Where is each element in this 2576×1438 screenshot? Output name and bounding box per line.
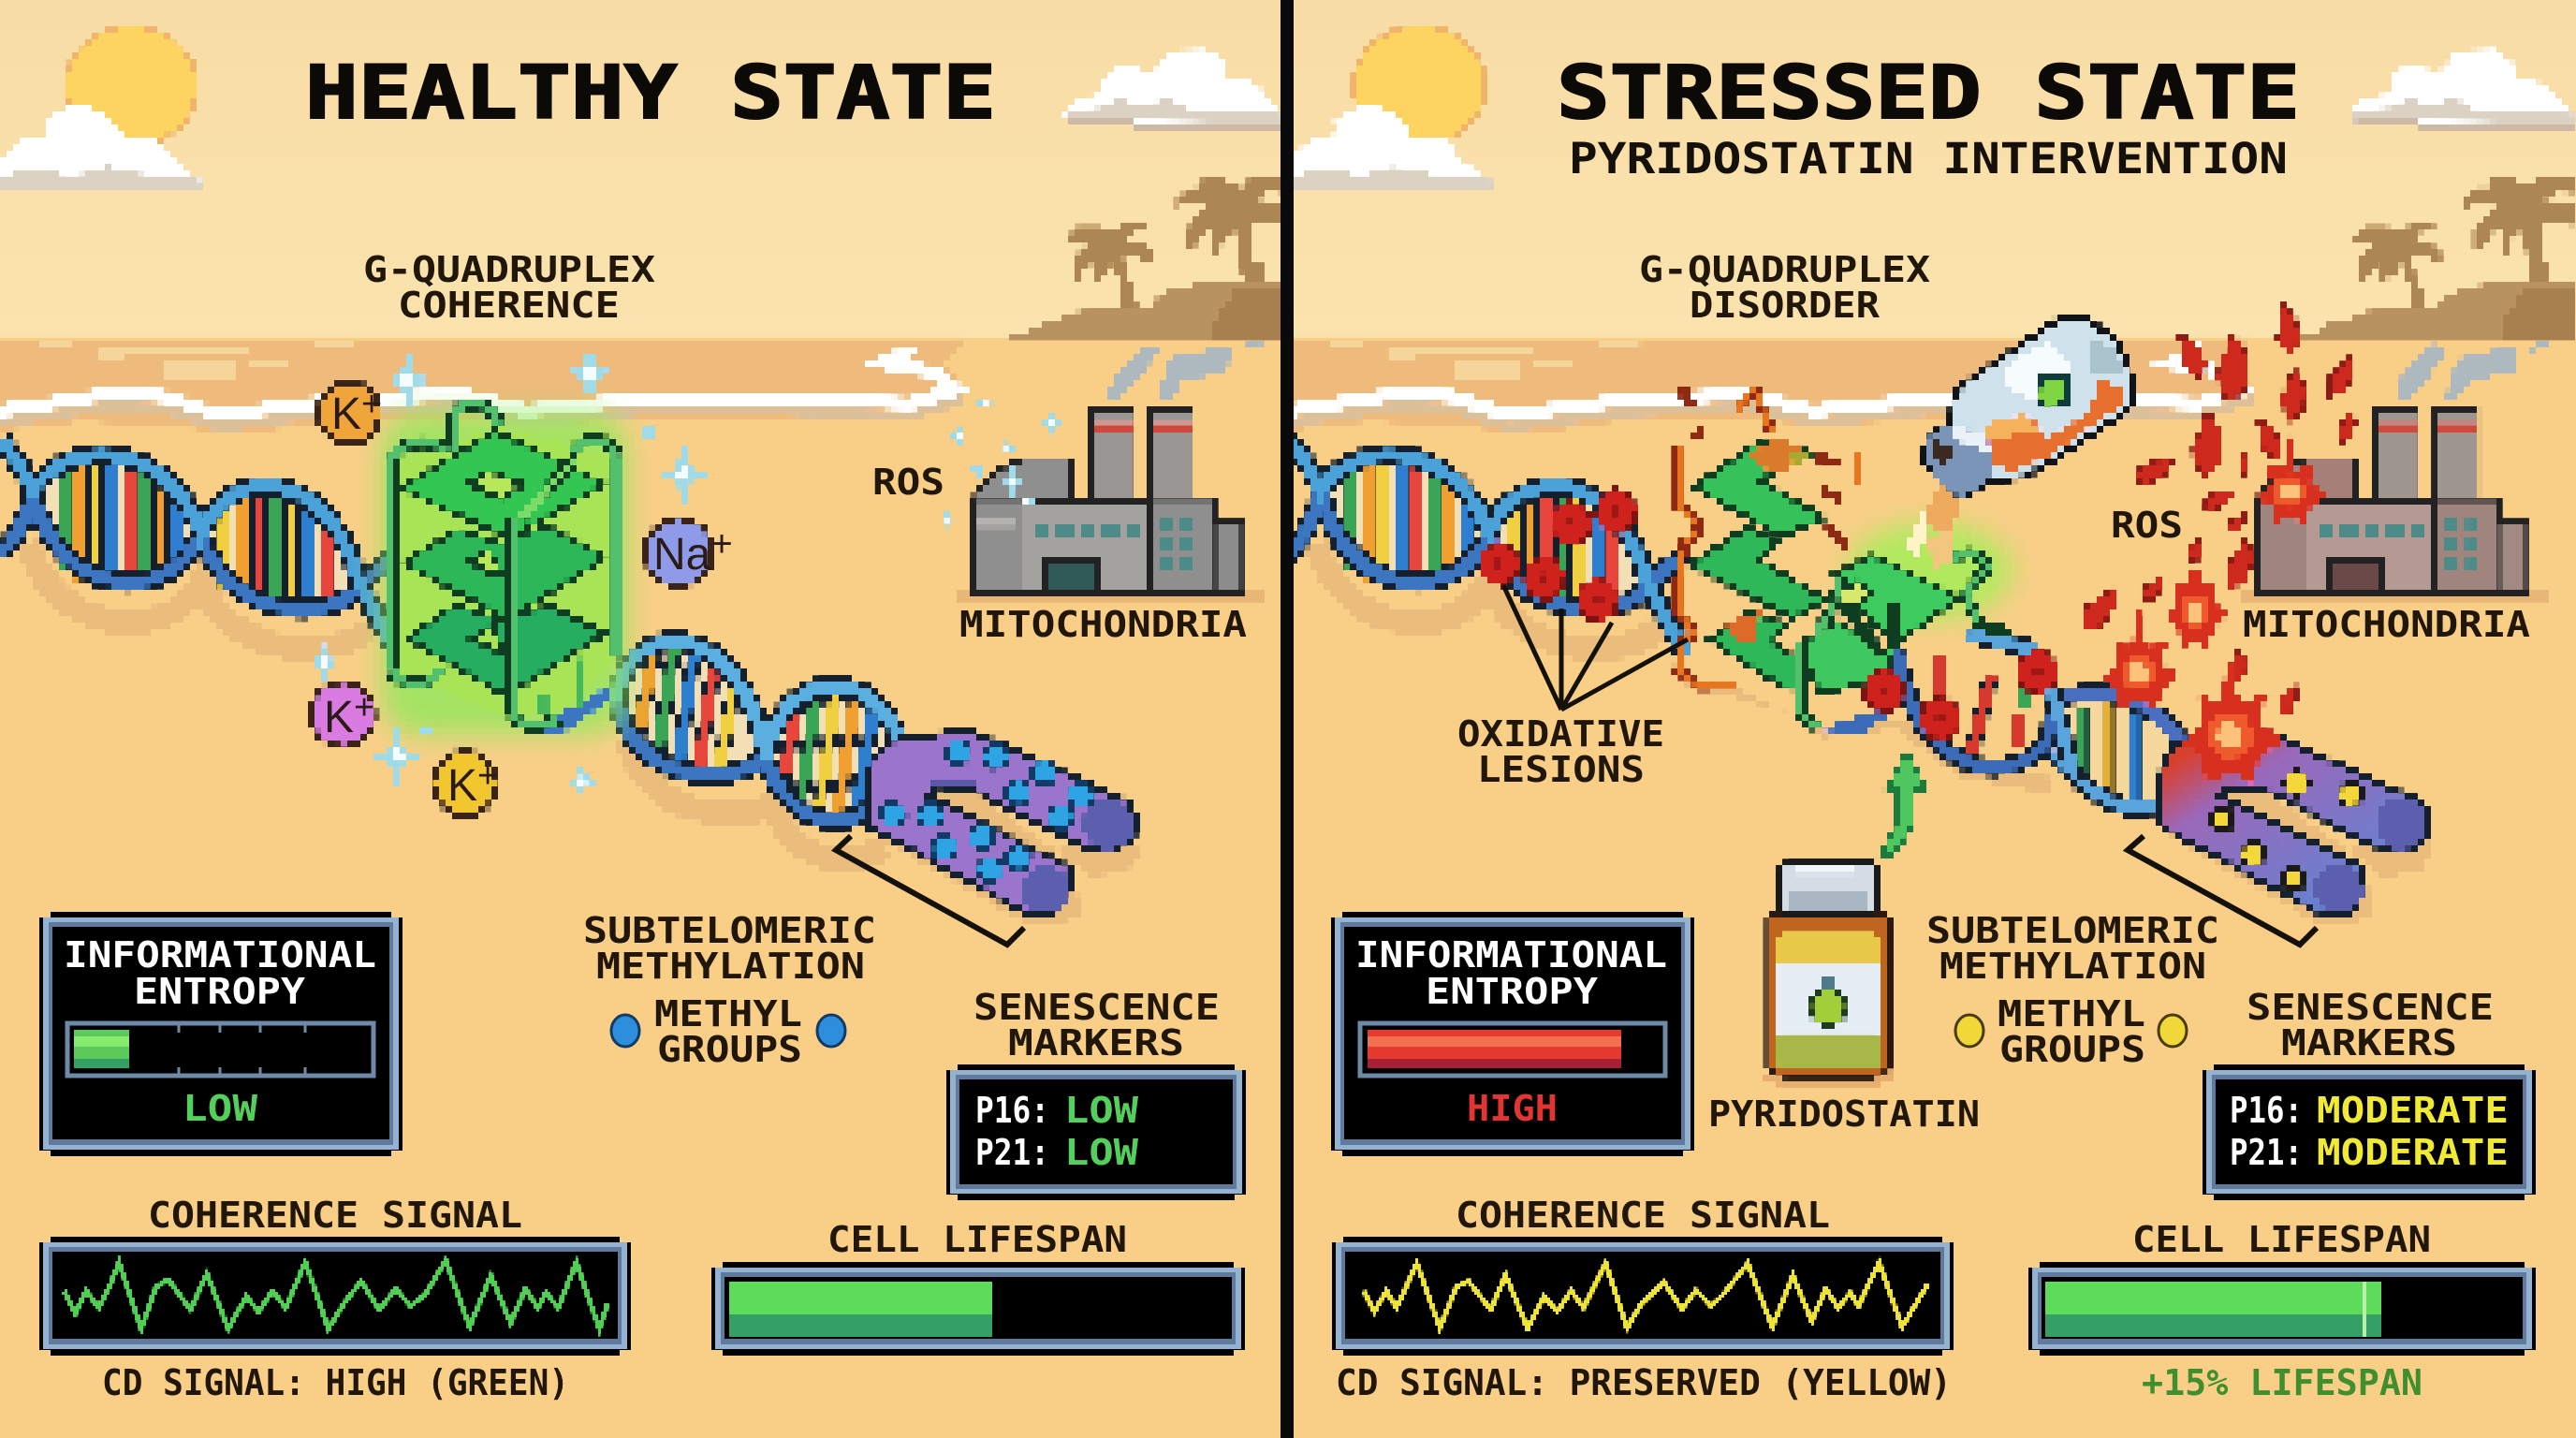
title: HEALTHY STATE xyxy=(305,51,996,136)
ion labels xyxy=(324,385,733,811)
label: mitochondria: MITOCHONDRIA xyxy=(959,604,1247,645)
label: oxidative lesions: LESIONS xyxy=(1477,749,1645,790)
glow around G-quadruplex xyxy=(382,412,627,735)
ion labels: K xyxy=(447,761,477,811)
label: coherence signal: COHERENCE SIGNAL xyxy=(148,1195,522,1236)
panel: senescence readout: P21: xyxy=(975,1132,1049,1173)
DNA helix downstream, damaged xyxy=(1897,634,2187,808)
title: STRESSED STATE xyxy=(1557,51,2300,136)
panel: healthy state xyxy=(0,0,1289,1438)
label: cell lifespan: CELL LIFESPAN xyxy=(827,1219,1127,1260)
illustration: stressed scene xyxy=(1288,26,2576,1090)
panel: informational entropy: HIGH xyxy=(1467,1088,1558,1129)
ion labels: + xyxy=(361,385,382,424)
icon: sparkles around G-quadruplex xyxy=(307,341,706,803)
panel: senescence readout: P21: xyxy=(2230,1132,2303,1173)
label: G-quadruplex coherence: G-QUADRUPLEX xyxy=(363,249,655,290)
label: mitochondria: MITOCHONDRIA xyxy=(2243,604,2530,645)
label: coherence signal: COHERENCE SIGNAL xyxy=(1456,1195,1830,1236)
G-quadruplex structure xyxy=(390,404,618,734)
flame outlines around disordered G-quadruplex xyxy=(1678,384,1856,686)
DNA helix with lesions xyxy=(1288,440,1686,655)
label: subtelomeric methylation: SUBTELOMERIC xyxy=(583,910,876,951)
chart: coherence signal waveform xyxy=(39,1237,631,1356)
label: senescence markers xyxy=(2247,987,2494,1064)
panel: senescence readout xyxy=(2203,1064,2536,1200)
label: oxidative lesions: OXIDATIVE xyxy=(1457,713,1664,755)
icon: pyridostatin jar xyxy=(1764,861,1895,1090)
legend: methyl groups: METHYL xyxy=(654,993,802,1034)
label: oxidative lesions xyxy=(1457,713,1664,790)
panel: informational entropy xyxy=(39,912,402,1156)
icon: factory mitochondria xyxy=(2241,411,2549,600)
icon: damaged telomere xyxy=(2159,730,2431,925)
panel: informational entropy: ENTROPY xyxy=(1426,971,1598,1012)
label: senescence markers: MARKERS xyxy=(2281,1022,2457,1064)
DNA helix downstream xyxy=(616,635,900,859)
label: G-quadruplex disorder: G-QUADRUPLEX xyxy=(1639,249,1930,290)
label: G-quadruplex disorder xyxy=(1639,249,1930,326)
panel: senescence readout: LOW xyxy=(1064,1090,1138,1131)
arrow: drug binding xyxy=(1881,752,1927,857)
panel: senescence readout: LOW xyxy=(1064,1132,1138,1173)
label: senescence markers: SENESCENCE xyxy=(973,987,1220,1028)
icon: ROS fragments and bursts xyxy=(2075,303,2360,784)
oxidative lesions on DNA xyxy=(1479,489,2058,741)
panel: senescence readout: P16: xyxy=(975,1090,1049,1131)
subtitle: PYRIDOSTATIN INTERVENTION xyxy=(1569,134,2288,183)
bottle pouring pyridostatin xyxy=(1924,318,2132,524)
label: lifespan gain: +15% LIFESPAN xyxy=(2142,1362,2422,1403)
chart: cell lifespan bar xyxy=(2028,1262,2536,1356)
center divider xyxy=(1281,0,1294,1438)
chart: coherence signal waveform xyxy=(1332,1237,1954,1356)
ion labels: Na xyxy=(653,530,710,580)
legend: methyl groups: METHYL xyxy=(1998,993,2145,1034)
label: G-quadruplex disorder: DISORDER xyxy=(1690,285,1880,326)
label: pyridostatin: PYRIDOSTATIN xyxy=(1708,1093,1980,1135)
panel: senescence readout: MODERATE xyxy=(2317,1090,2509,1131)
icon: ROS sparkles xyxy=(939,390,1061,532)
panel: informational entropy xyxy=(1331,912,1694,1156)
scene background: sky and beach xyxy=(1288,0,2576,1438)
icon: ions xyxy=(311,382,712,815)
bracket: subtelomeric region xyxy=(2128,836,2317,945)
label: senescence markers xyxy=(973,987,1220,1064)
chart: cell lifespan bar xyxy=(711,1262,1245,1356)
label: ROS: ROS xyxy=(2111,505,2183,546)
icon: telomere with shadow xyxy=(866,730,1138,925)
scene background: sky and beach xyxy=(0,0,1288,1438)
label: G-quadruplex coherence: COHERENCE xyxy=(398,285,620,326)
panel: senescence readout xyxy=(946,1064,1246,1200)
sun, clouds, palm island and shoreline xyxy=(1288,26,2576,433)
icon: factory mitochondria xyxy=(957,411,1265,600)
DNA helix upstream xyxy=(0,440,398,655)
ion labels: K xyxy=(331,389,361,439)
label: CD signal: CD SIGNAL: HIGH (GREEN) xyxy=(102,1362,569,1403)
label: G-quadruplex coherence xyxy=(363,249,655,326)
pointer lines: oxidative lesions xyxy=(1503,585,1688,710)
panel: informational entropy: LOW xyxy=(183,1088,257,1129)
binding cage xyxy=(1800,553,2010,733)
panel: senescence readout: P16: xyxy=(2230,1090,2303,1131)
ion labels: + xyxy=(477,756,498,796)
ion labels: + xyxy=(710,523,733,565)
icon: blue methyl groups on telomere xyxy=(881,741,1093,883)
label: ROS: ROS xyxy=(872,462,944,503)
label: subtelomeric methylation xyxy=(1926,910,2219,987)
label: cell lifespan: CELL LIFESPAN xyxy=(2132,1219,2431,1260)
panel: informational entropy: ENTROPY xyxy=(134,971,305,1012)
label: subtelomeric methylation: METHYLATION xyxy=(1939,946,2206,987)
legend: methyl groups: GROUPS xyxy=(1999,1029,2145,1070)
label: senescence markers: MARKERS xyxy=(1008,1022,1184,1064)
sun, clouds, palm island and shoreline xyxy=(0,26,1289,433)
panel: senescence readout: MODERATE xyxy=(2317,1132,2509,1173)
illustration: healthy scene xyxy=(0,26,1289,925)
ion labels: K xyxy=(324,693,354,742)
icon: yellow methyl groups on telomere xyxy=(2210,771,2363,890)
label: subtelomeric methylation: SUBTELOMERIC xyxy=(1926,910,2219,951)
legend: methyl groups xyxy=(611,993,845,1070)
shadow under damaged DNA xyxy=(1682,683,2053,794)
label: CD signal: CD SIGNAL: PRESERVED (YELLOW) xyxy=(1336,1362,1952,1403)
bracket: subtelomeric region xyxy=(836,836,1024,945)
legend: methyl groups: GROUPS xyxy=(657,1029,802,1070)
label: subtelomeric methylation xyxy=(583,910,876,987)
pour stream of pyridostatin xyxy=(1903,471,1963,568)
panel: informational entropy: INFORMATIONAL xyxy=(64,934,376,976)
glow at drug binding site xyxy=(1848,522,2012,620)
disordered G-quadruplex chevrons xyxy=(1690,437,1825,690)
panel: stressed state xyxy=(1288,0,2576,1438)
label: senescence markers: SENESCENCE xyxy=(2247,987,2494,1028)
label: subtelomeric methylation: METHYLATION xyxy=(596,946,865,987)
ion labels: + xyxy=(354,688,374,727)
panel: informational entropy: INFORMATIONAL xyxy=(1355,934,1667,976)
legend: methyl groups xyxy=(1955,993,2187,1070)
